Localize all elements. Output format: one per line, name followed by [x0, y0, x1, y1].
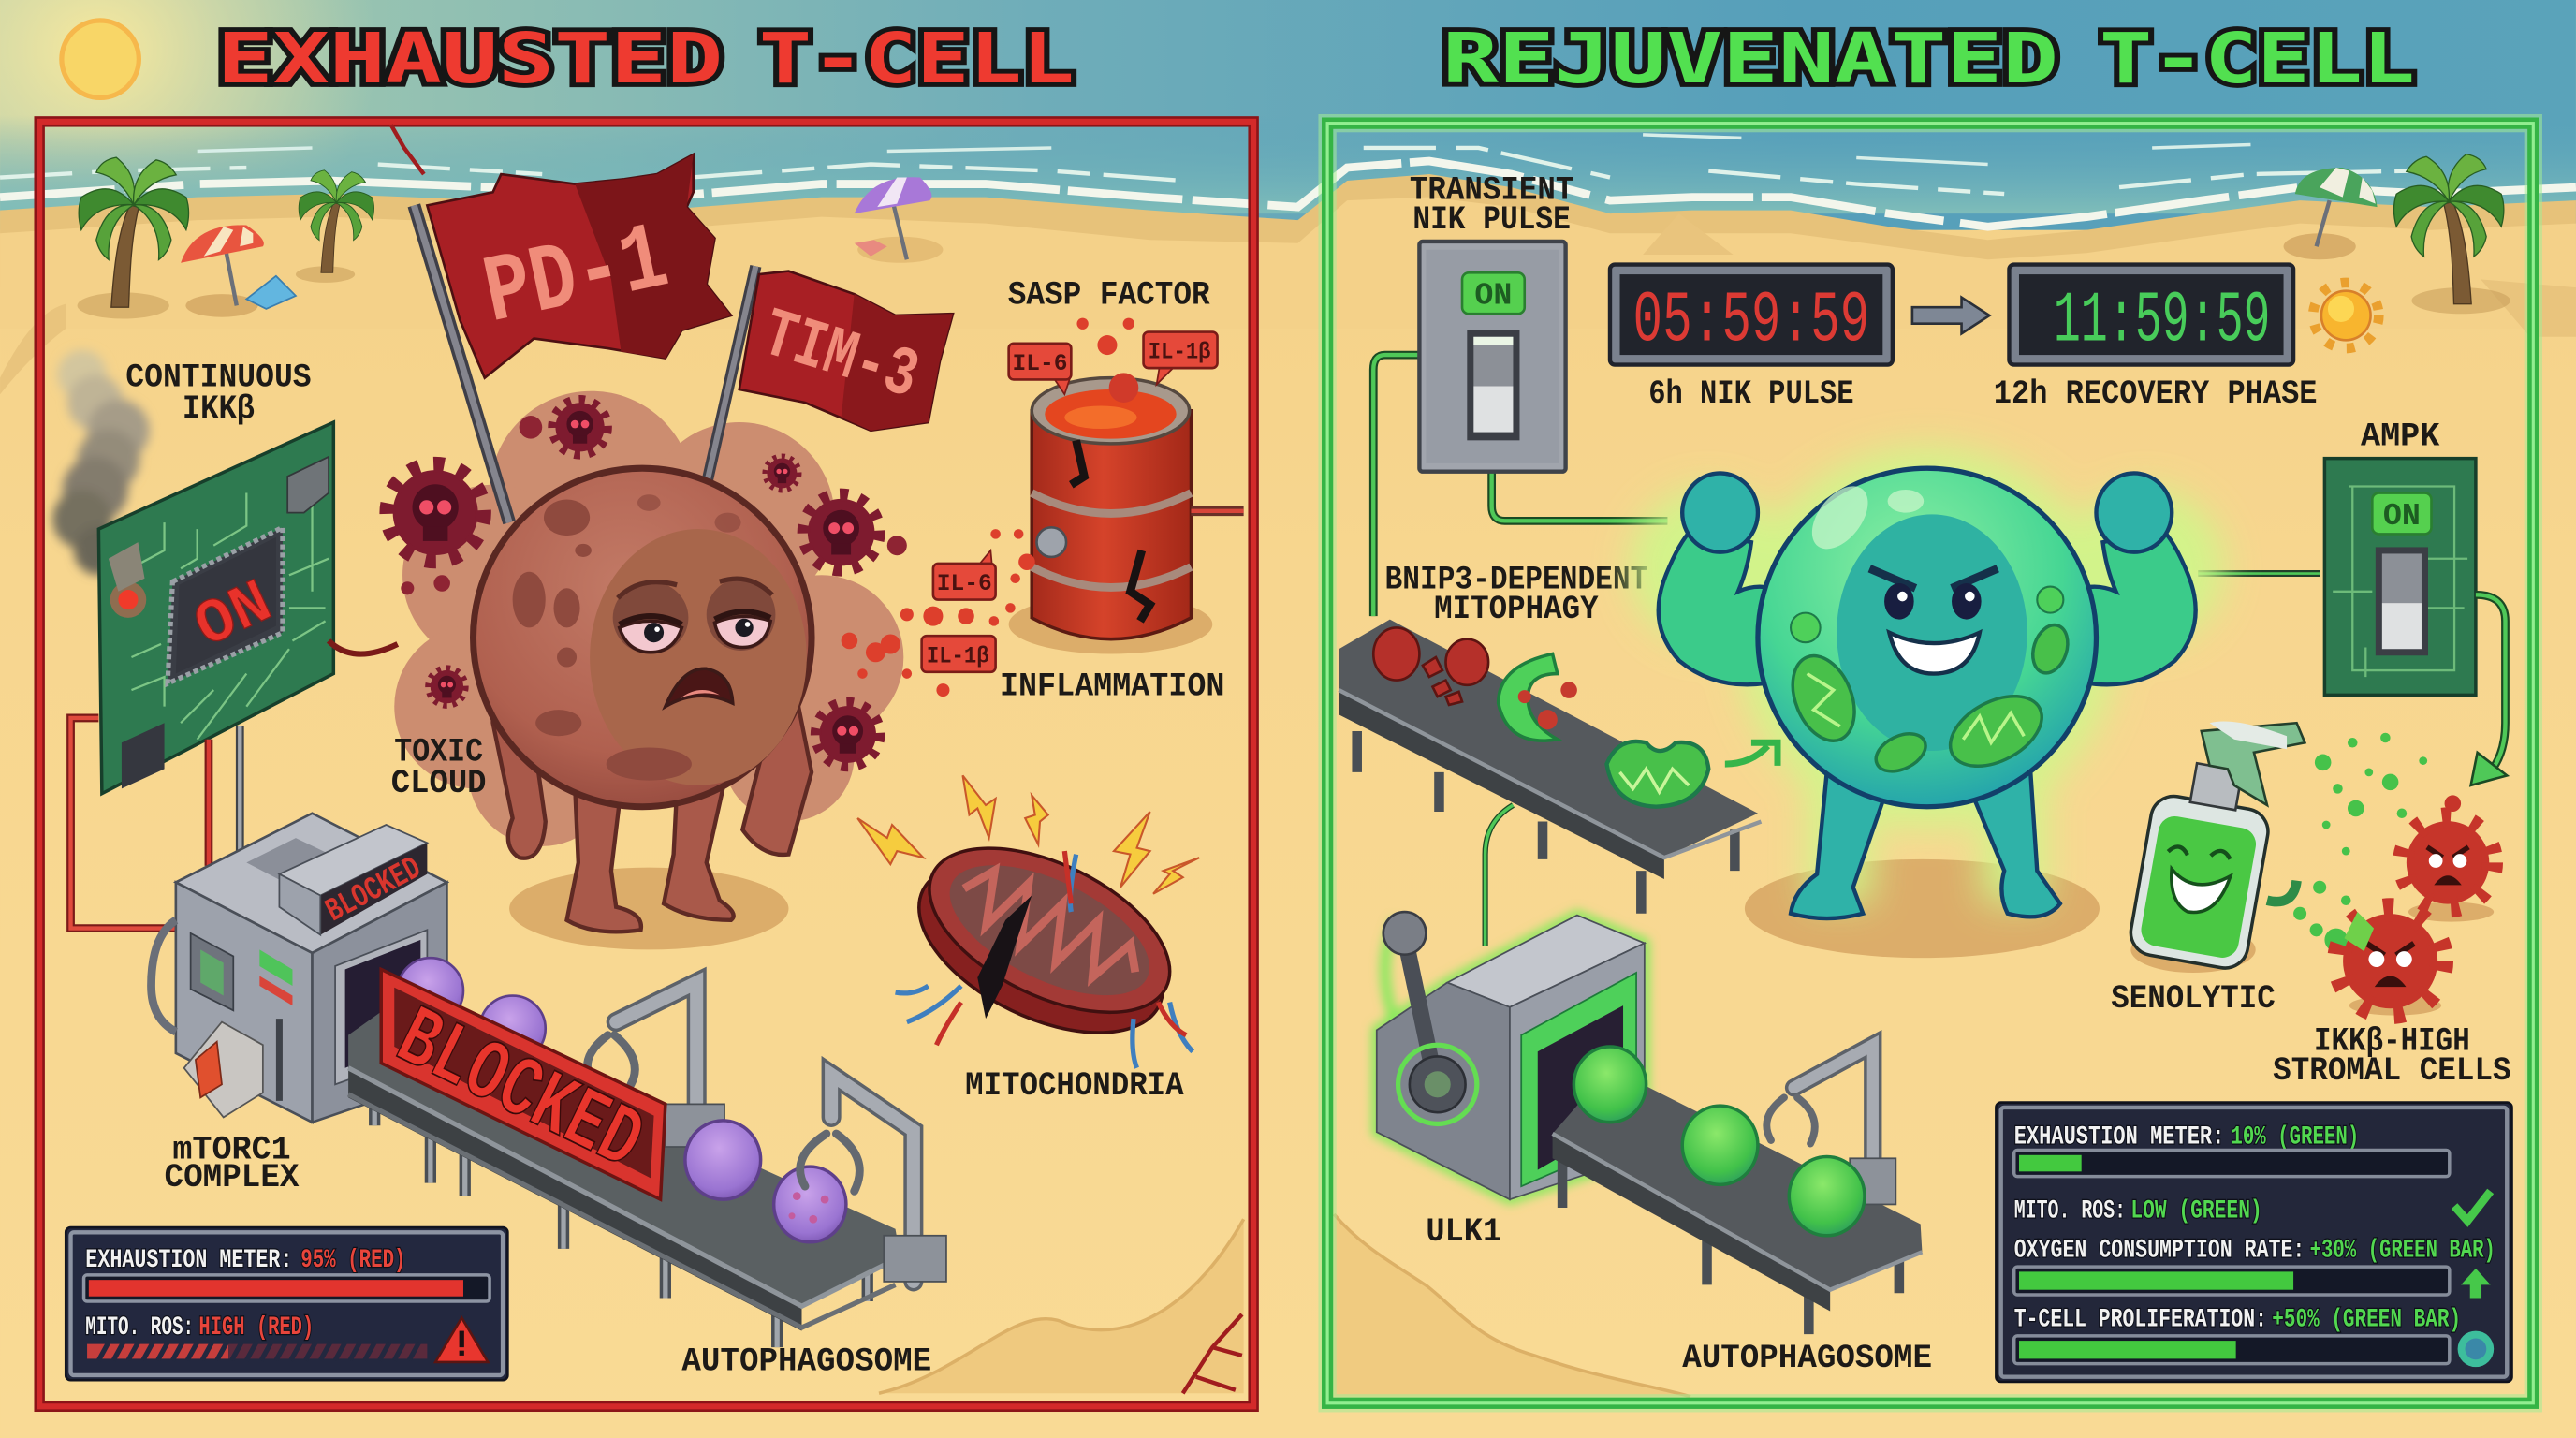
- label: autophagosome: AUTOPHAGOSOME: [681, 1343, 931, 1381]
- body: [474, 468, 812, 807]
- broken red mitochondria: [1373, 627, 1488, 705]
- toxic cloud: [394, 391, 903, 846]
- status panel: rejuvenated: 10% (GREEN): [2231, 1123, 2359, 1152]
- left arm: [1659, 529, 1797, 684]
- conveyor: mitophagy line: [1339, 620, 1778, 914]
- right arm: [2056, 529, 2196, 684]
- label: transient NIK pulse: TRANSIENT: [1410, 171, 1573, 209]
- status panel: rejuvenated: LOW (GREEN): [2130, 1196, 2262, 1225]
- label: transient NIK pulse: NIK PULSE: [1412, 201, 1571, 239]
- robot arm: [1766, 1045, 1873, 1191]
- title: exhausted: EXHAUSTED: [217, 20, 723, 99]
- scenery: palm and umbrella: [2284, 154, 2510, 314]
- tag: IL-6 top: IL-6: [1013, 352, 1067, 377]
- status panel: exhausted: HIGH (RED): [198, 1313, 314, 1343]
- tag: IL-6 lower: IL-6: [937, 572, 992, 597]
- lightning bolts: [857, 775, 1199, 894]
- label: toxic cloud: TOXIC: [394, 734, 483, 771]
- status panel: exhausted: 95% (RED): [300, 1246, 406, 1275]
- fists: [1682, 473, 2172, 552]
- status panel: rejuvenated: EXHAUSTION METER:: [2014, 1123, 2224, 1152]
- panel: exhausted T-cell: [39, 122, 1253, 1406]
- tag: IL-6 lower: [933, 550, 996, 600]
- wires: [71, 640, 398, 929]
- green vesicles: [1573, 1047, 1647, 1123]
- conveyor: autophagosome line: [1553, 1045, 1922, 1334]
- AMPK switch: ON: [2383, 499, 2421, 535]
- title: rejuvenated: [1442, 20, 2415, 99]
- label: continuous IKKβ: IKKβ: [183, 390, 255, 428]
- droplets: [842, 318, 1134, 697]
- icon: check: [2454, 1191, 2491, 1221]
- status panel: exhausted: EXHAUSTION METER:: [85, 1246, 292, 1275]
- tag: IL-1β top: [1144, 332, 1218, 385]
- status panel: rejuvenated: +50% (GREEN BAR): [2272, 1305, 2461, 1334]
- rejuvenated T-cell character: [1630, 447, 2224, 958]
- smoke: [52, 350, 150, 575]
- timer: 12h: 11:59:59: [2054, 281, 2271, 362]
- label: transient NIK pulse: [1410, 171, 1573, 239]
- label: IKKβ-high stromal cells: IKKβ-HIGH: [2314, 1022, 2470, 1060]
- inner mitochondria: [1781, 621, 2073, 781]
- spray droplets: [2293, 733, 2427, 951]
- timer: 6h: [1610, 265, 1893, 365]
- engulfing vesicle: [1499, 654, 1558, 741]
- title: rejuvenated: REJUVENATED: [1442, 20, 2058, 99]
- timer: 6h: 05:59:59: [1633, 281, 1869, 362]
- limbs: [493, 657, 812, 932]
- timer: 12h: [2009, 265, 2293, 365]
- status panel: exhausted: MITO. ROS:: [85, 1313, 194, 1343]
- nucleus: [590, 529, 807, 785]
- BLOCKED sign: [381, 969, 666, 1199]
- tag: IL-1β lower: [922, 636, 996, 672]
- label: autophagosome: AUTOPHAGOSOME: [1682, 1340, 1932, 1377]
- senolytic spray bottle: [2128, 721, 2427, 973]
- label: mTORC1 complex: COMPLEX: [165, 1159, 300, 1196]
- label: BNIP3-dependent mitophagy: MITOPHAGY: [1434, 591, 1599, 628]
- label: toxic cloud: CLOUD: [391, 765, 487, 802]
- mTORC1 machine: BLOCKED: [320, 850, 428, 931]
- label: mitochondria: MITOCHONDRIA: [965, 1067, 1184, 1105]
- label: senolytic: SENOLYTIC: [2111, 980, 2276, 1018]
- icon: sun: [59, 18, 141, 100]
- robot arm 1: [587, 983, 696, 1134]
- flag: PD-1: [414, 154, 731, 522]
- tag: IL-1β top: IL-1β: [1149, 341, 1211, 366]
- icon: warning triangle: [435, 1318, 488, 1362]
- nucleus: [1837, 514, 2027, 751]
- label: SASP factor: SASP FACTOR: [1008, 277, 1210, 315]
- label: continuous IKKβ: CONTINUOUS: [125, 359, 312, 396]
- label: mTORC1 complex: [165, 1131, 300, 1196]
- body: [1758, 468, 2096, 807]
- label: inflammation: INFLAMMATION: [1000, 668, 1224, 705]
- label: continuous IKKβ: [125, 359, 312, 428]
- NIK pulse switch: ON: [1474, 279, 1512, 315]
- label: ULK1: ULK1: [1426, 1213, 1501, 1251]
- tag: IL-1β lower: IL-1β: [927, 644, 989, 669]
- title: exhausted: [217, 20, 1075, 99]
- conveyor: blocked autophagosome line: [348, 958, 946, 1347]
- label: 12h recovery: 12h RECOVERY PHASE: [1994, 375, 2318, 413]
- icon: cell orb: [2458, 1331, 2494, 1367]
- damaged mitochondrion: [857, 775, 1199, 1068]
- scenery: palms and umbrellas: [78, 157, 943, 318]
- face: [613, 579, 775, 707]
- frame: cracked red border: [39, 122, 1253, 1406]
- SASP barrel: [842, 318, 1244, 697]
- legs: [374, 1084, 868, 1347]
- label: IKKβ-high stromal cells: [2273, 1022, 2511, 1090]
- frame: glowing green border: [1327, 124, 2533, 1403]
- healthy mitochondrion: [1606, 741, 1708, 807]
- robot arm 2: [800, 1075, 914, 1282]
- arrow: timer to timer: [1912, 298, 1989, 333]
- arrow: to cell: [1725, 742, 1778, 766]
- status panel: rejuvenated: MITO. ROS:: [2014, 1196, 2126, 1225]
- flag: TIM-3: [707, 266, 953, 485]
- glow: [1630, 447, 2224, 903]
- status panel: rejuvenated: +30% (GREEN BAR): [2310, 1237, 2496, 1266]
- title: exhausted: T-CELL: [759, 20, 1075, 99]
- wires: [1373, 355, 1667, 616]
- label: IKKβ-high stromal cells: STROMAL CELLS: [2273, 1052, 2511, 1090]
- label: AMPK: AMPK: [2361, 418, 2440, 456]
- IKKβ circuit board: [52, 350, 398, 929]
- status panel: rejuvenated: OXYGEN CONSUMPTION RATE:: [2014, 1237, 2305, 1266]
- IKKβ circuit board: ON: [184, 568, 284, 665]
- IKKβ-high stromal cells: [2339, 795, 2494, 1016]
- label: BNIP3-dependent mitophagy: [1385, 561, 1647, 628]
- flag: TIM-3: TIM-3: [754, 297, 927, 418]
- status panel: rejuvenated: T-CELL PROLIFERATION:: [2014, 1305, 2267, 1334]
- icon: up arrow: [2461, 1269, 2491, 1298]
- ULK1 machine: [1377, 805, 1645, 1199]
- title: rejuvenated: T-CELL: [2100, 20, 2415, 99]
- label: BNIP3-dependent mitophagy: BNIP3-DEPENDENT: [1385, 561, 1647, 598]
- legs: [1791, 772, 2060, 918]
- label: toxic cloud: [391, 734, 487, 802]
- icon: small sun: [2313, 283, 2378, 348]
- flag: PD-1: PD-1: [475, 205, 678, 349]
- AMPK switch: [2198, 459, 2507, 785]
- panel: rejuvenated T-cell: [1327, 124, 2533, 1403]
- spots: [513, 494, 741, 781]
- label: mTORC1 complex: mTORC1: [172, 1131, 291, 1168]
- tag: IL-6 top: [1009, 344, 1071, 394]
- shadow: [509, 868, 788, 949]
- label: 6h NIK pulse: 6h NIK PULSE: [1648, 375, 1854, 413]
- purple vesicles: [398, 958, 463, 1023]
- conveyor: blocked autophagosome line: BLOCKED: [381, 991, 657, 1192]
- toxic viruses: [388, 400, 907, 767]
- exhausted T-cell character: [474, 468, 812, 949]
- NIK pulse switch: [1373, 242, 1667, 616]
- status panel: rejuvenated: [1996, 1103, 2511, 1382]
- face: [1869, 568, 1998, 674]
- status panel: exhausted: [66, 1227, 507, 1380]
- mTORC1 machine: [152, 814, 446, 1123]
